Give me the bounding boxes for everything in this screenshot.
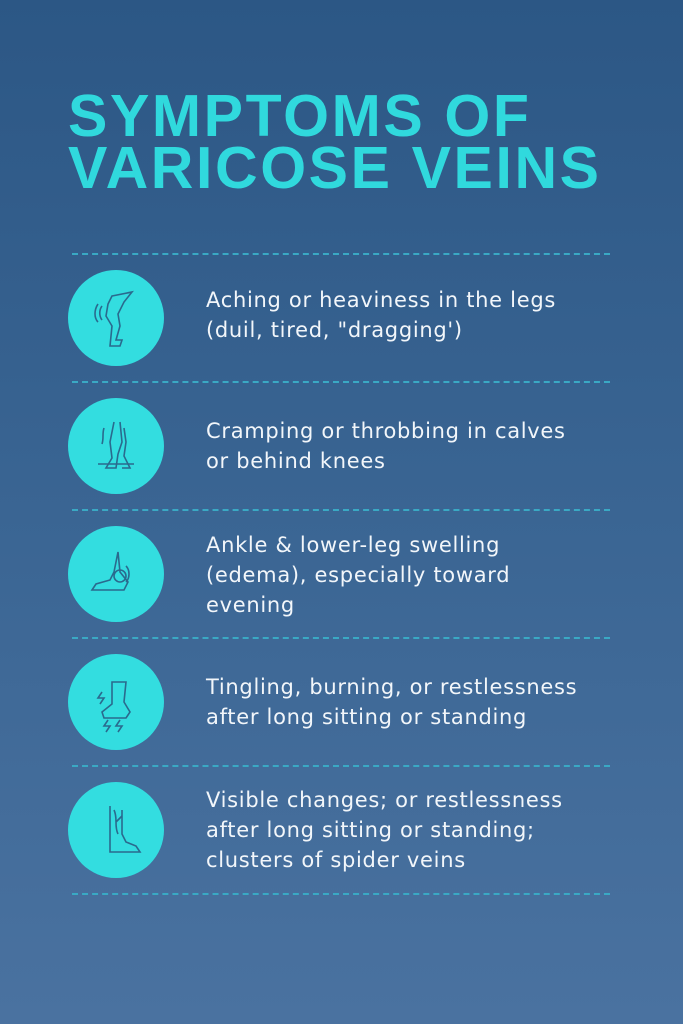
text 3: (edema), especially toward <box>206 563 510 587</box>
icon: visible veins leg <box>68 782 164 878</box>
text 5: Visible changes; or restlessness <box>206 788 563 812</box>
icon: ankle swelling <box>68 526 164 622</box>
icon: aching leg <box>68 270 164 366</box>
text 5: clusters of spider veins <box>206 848 466 872</box>
text 1: (duil, tired, "dragging') <box>206 318 463 342</box>
text 3: evening <box>206 593 295 617</box>
icon: cramping calves <box>68 398 164 494</box>
text 5 <box>206 788 563 872</box>
text 3 <box>206 533 510 617</box>
text 5: after long sitting or standing; <box>206 818 535 842</box>
text 4: after long sitting or standing <box>206 705 527 729</box>
text 4: Tingling, burning, or restlessness <box>206 675 577 699</box>
icon: tingling foot <box>68 654 164 750</box>
title <box>68 83 602 201</box>
text 2: or behind knees <box>206 449 386 473</box>
text 2: Cramping or throbbing in calves <box>206 419 566 443</box>
text 4 <box>206 675 577 729</box>
title: SYMPTOMS OF <box>68 83 532 149</box>
title: VARICOSE VEINS <box>68 135 602 201</box>
text 1 <box>206 288 556 342</box>
text 3: Ankle & lower-leg swelling <box>206 533 500 557</box>
text 1: Aching or heaviness in the legs <box>206 288 556 312</box>
text 2 <box>206 419 566 473</box>
